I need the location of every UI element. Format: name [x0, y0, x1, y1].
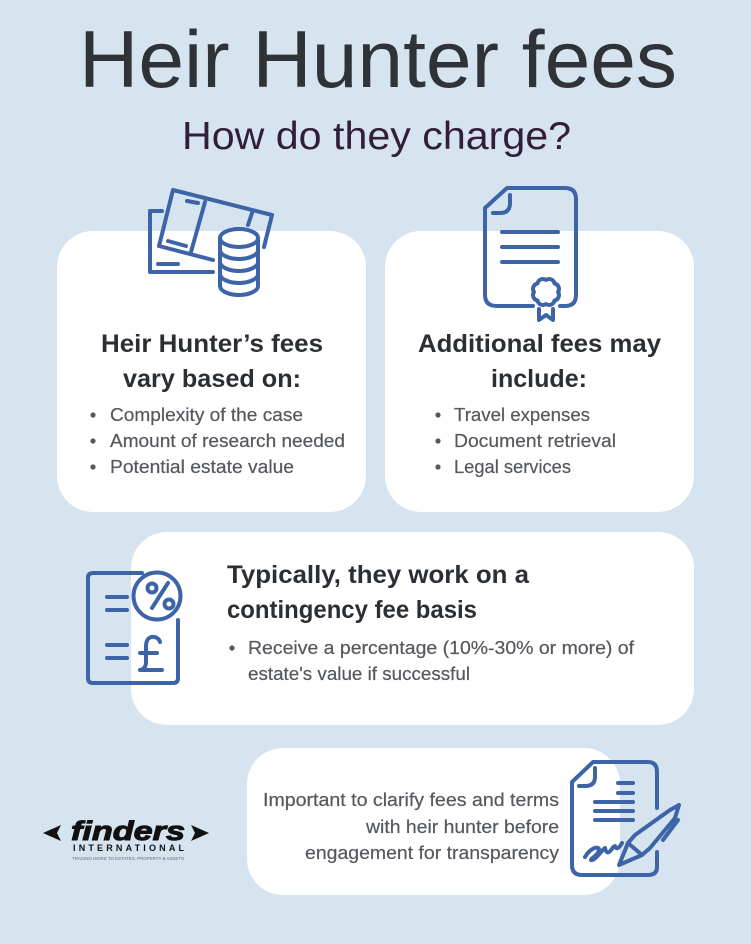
list: fees vary: Amount of research needed: [110, 431, 345, 451]
list: fees vary: [90, 405, 345, 477]
icon: percent and pound: [88, 572, 180, 683]
heading: contingency fee: contingency fee basis: [227, 596, 477, 624]
logo: finders international: [43, 816, 209, 861]
list: additional fees: Travel expenses: [454, 405, 590, 425]
icon: money and coins: [150, 190, 272, 295]
logo: finders international: INTERNATIONAL: [73, 843, 184, 853]
text: clarify fees: Important to clarify fees and terms: [263, 790, 559, 810]
logo: finders international: TRACING HEIRS TO ESTATES, PROPERTY & ASSETS: [72, 856, 184, 861]
panel: contingency fee: [131, 532, 694, 725]
panel: fees vary: [57, 231, 366, 512]
icon: signed document: [572, 762, 679, 875]
text: percentage: Receive a percentage (10%-30% or more) of: [248, 638, 635, 658]
list: additional fees: Legal services: [454, 457, 571, 477]
heading: additional fees: include:: [491, 365, 587, 393]
heading: contingency fee: [227, 561, 530, 624]
text: percentage: [229, 638, 635, 684]
heading: additional fees: Additional fees may: [418, 330, 661, 358]
subtitle: How do they charge?: [182, 115, 571, 158]
heading: fees vary: vary based on:: [123, 365, 301, 393]
heading: fees vary: Heir Hunter’s fees: [101, 330, 323, 358]
list: additional fees: Document retrieval: [454, 431, 616, 451]
text: clarify fees: [263, 790, 559, 863]
title: Heir Hunter fees: [79, 15, 677, 105]
heading: contingency fee: Typically, they work on a: [227, 561, 530, 589]
panel: additional fees: [385, 231, 694, 512]
heading: fees vary: [101, 330, 323, 393]
heading: additional fees: [418, 330, 661, 393]
text: percentage: estate's value if successful: [248, 664, 470, 684]
text: clarify fees: engagement for transparency: [305, 843, 559, 863]
list: additional fees: [435, 405, 616, 477]
logo: finders international: finders: [71, 816, 185, 846]
text: clarify fees: with heir hunter before: [365, 817, 559, 837]
panel: clarify fees: [247, 748, 620, 895]
list: fees vary: Complexity of the case: [110, 405, 303, 425]
icon: certificate document: [485, 188, 576, 320]
list: fees vary: Potential estate value: [110, 457, 294, 477]
